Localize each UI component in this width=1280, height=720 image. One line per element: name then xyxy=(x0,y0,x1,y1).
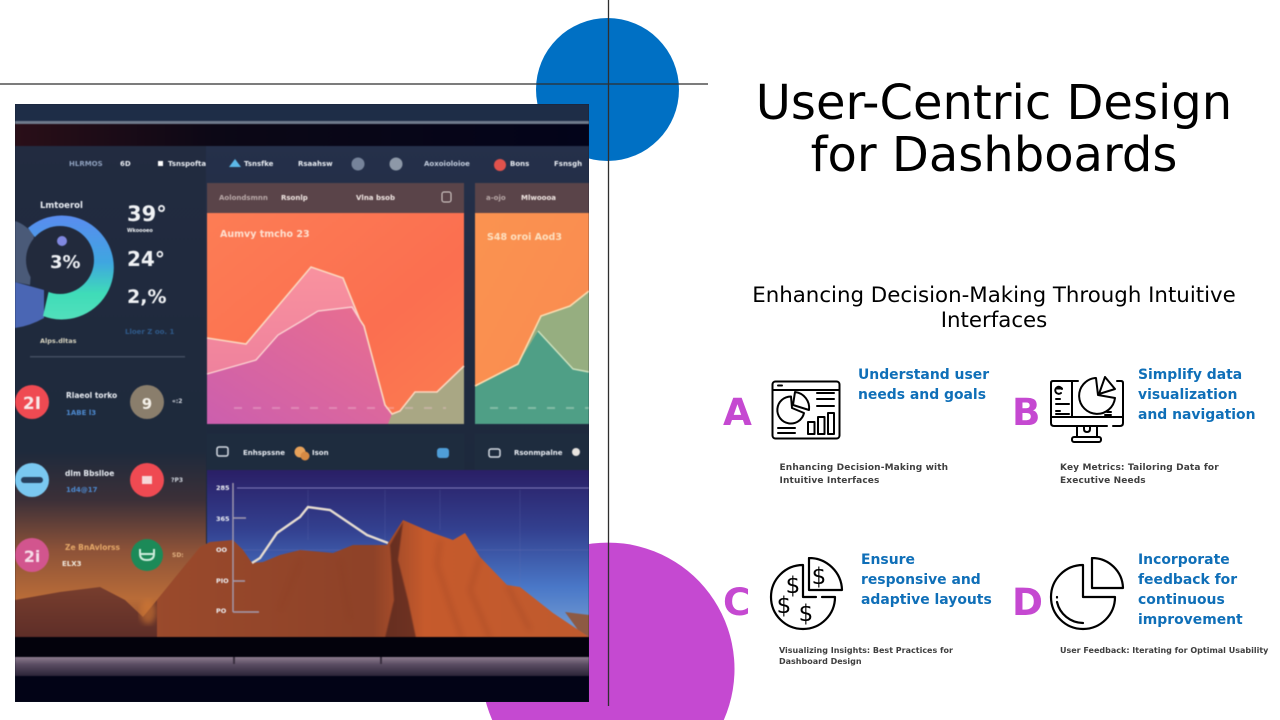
metric figures: 39° xyxy=(127,202,167,226)
toolbar row xyxy=(207,434,589,470)
description B: Executive Needs xyxy=(1060,476,1146,486)
heading B: Simplify data xyxy=(1138,366,1242,382)
chart card: right area chart: S48 oroi Aod3 xyxy=(487,232,562,243)
icon: dollar pie: $ xyxy=(812,564,826,590)
description A: Enhancing Decision-Making with xyxy=(780,463,948,473)
heading C: responsive and xyxy=(861,572,981,588)
status list xyxy=(15,385,184,572)
icon: dollar pie: $ xyxy=(799,601,813,627)
toolbar row: Enhspssne xyxy=(243,449,285,457)
heading C: Ensure xyxy=(861,552,915,568)
subtitle: Enhancing Decision-Making Through Intuitive xyxy=(752,283,1236,308)
description B xyxy=(1060,463,1219,486)
navigation row: Tsnspofta xyxy=(168,160,206,168)
letter D: D xyxy=(1012,580,1043,624)
crosshair lines xyxy=(0,0,708,706)
subtitle: Interfaces xyxy=(941,308,1047,333)
mountain chart: PIO xyxy=(216,577,229,585)
navigation row: 6D xyxy=(120,160,131,168)
status list: 9 xyxy=(142,395,152,413)
metric figures: Wkoooeo xyxy=(127,228,153,234)
chart card: right area chart: Mlwoooa xyxy=(521,194,556,202)
navigation row: Rsaahsw xyxy=(298,160,333,168)
chart card: right area chart xyxy=(475,183,589,424)
status list: ELX3 xyxy=(62,560,82,568)
mountain chart: PO xyxy=(216,607,227,615)
description C xyxy=(779,646,953,666)
toolbar row: Ison xyxy=(312,449,329,457)
description C: Visualizing Insights: Best Practices for xyxy=(779,646,953,655)
heading A: needs and goals xyxy=(858,386,986,402)
icon: dollar pie: $ xyxy=(786,573,800,599)
icon: pie chart xyxy=(1050,557,1124,630)
icon: dollar pie: $ xyxy=(777,593,791,619)
chart card: left area chart: Aumvy tmcho 23 xyxy=(220,229,310,240)
heading D: improvement xyxy=(1138,612,1243,628)
navigation row xyxy=(69,158,582,171)
description B: Key Metrics: Tailoring Data for xyxy=(1060,463,1219,473)
icon: dashboard window xyxy=(772,380,840,440)
letter B: B xyxy=(1012,390,1040,434)
status list: SD: xyxy=(172,552,184,559)
status list: dlm Bbslloe xyxy=(65,469,114,478)
heading D: Incorporate xyxy=(1138,552,1230,568)
heading C: adaptive layouts xyxy=(861,592,992,608)
heading C xyxy=(861,552,992,608)
mountain chart: 365 xyxy=(216,515,230,523)
letter C: C xyxy=(723,580,750,624)
heading D: continuous xyxy=(1138,592,1225,608)
heading D: feedback for xyxy=(1138,572,1237,588)
decorative circle: blue xyxy=(536,18,679,161)
icon: dollar pie xyxy=(770,557,844,630)
heading A: Understand user xyxy=(858,366,989,382)
heading D xyxy=(1138,552,1243,628)
status list: 1ABE l3 xyxy=(66,409,96,417)
navigation row: Bons xyxy=(510,160,529,168)
subtitle xyxy=(752,283,1236,333)
metric figures: Lloer Z oo. 1 xyxy=(125,328,175,336)
description D: User Feedback: Iterating for Optimal Usability xyxy=(1060,646,1268,655)
status list: Rlaeol torko xyxy=(66,391,117,400)
title xyxy=(756,75,1232,183)
heading B: and navigation xyxy=(1138,406,1256,422)
chart card: left area chart: Aolondsmnn xyxy=(219,194,268,202)
navigation row: Fsnsgh xyxy=(554,160,582,168)
donut chart: Lmtoerol xyxy=(40,201,83,211)
metric figures: 24° xyxy=(127,247,165,271)
mountain chart: OO xyxy=(216,546,228,554)
status list: ?P3 xyxy=(171,477,183,484)
dashboard illustration xyxy=(15,104,589,702)
mountain chart: 285 xyxy=(216,484,230,492)
title: User-Centric Design xyxy=(756,75,1232,131)
metric figures: 2,% xyxy=(127,286,166,308)
chart card: left area chart: Vlna bsob xyxy=(356,194,395,202)
donut chart xyxy=(15,201,114,345)
chart card: right area chart: a-ojo xyxy=(486,194,506,202)
description A: Intuitive Interfaces xyxy=(780,476,880,486)
heading B: visualization xyxy=(1138,386,1237,402)
chart card: left area chart: Rsonlp xyxy=(281,194,308,202)
icon: monitor with pie xyxy=(1050,376,1124,443)
donut chart: 3% xyxy=(50,252,81,273)
status list: 2i xyxy=(24,547,40,566)
description C: Dashboard Design xyxy=(779,657,862,666)
heading A xyxy=(858,366,990,402)
navigation row: HLRMOS xyxy=(69,160,103,168)
heading B xyxy=(1138,366,1256,422)
status list: 2I xyxy=(23,394,41,414)
dashboard background xyxy=(15,146,589,638)
letter A: A xyxy=(723,390,752,434)
status list: Ze BnAvlorss xyxy=(65,543,121,552)
chart card: left area chart xyxy=(207,183,464,424)
decorative circle: purple xyxy=(486,542,734,720)
bottom bezel xyxy=(15,637,589,702)
toolbar row: Rsonmpalne xyxy=(514,449,563,457)
navigation row: Aoxoioloioe xyxy=(424,160,470,168)
window top bar xyxy=(15,104,589,146)
description A xyxy=(780,463,948,486)
metric figures xyxy=(125,202,175,336)
status list: 1d4@17 xyxy=(66,486,98,494)
navigation row: Tsnsfke xyxy=(244,160,274,168)
mountain chart xyxy=(15,470,589,638)
donut chart: Alps.dltas xyxy=(40,337,77,345)
title: for Dashboards xyxy=(811,127,1177,183)
status list: «:2 xyxy=(172,398,182,405)
